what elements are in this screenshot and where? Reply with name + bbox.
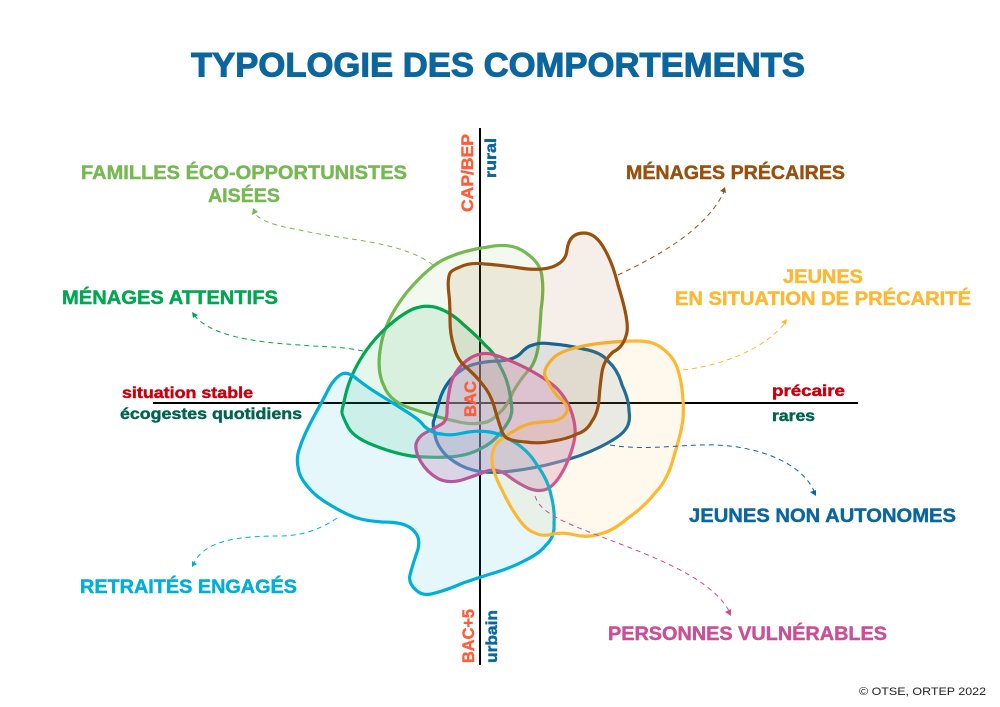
label: familles éco-opportunistes <box>81 161 407 207</box>
axis label: rares: rares <box>772 408 815 425</box>
axis label: BAC+5: BAC+5 <box>460 609 478 663</box>
arrow: jeunes précarité <box>683 319 787 370</box>
label: jeunes en situation de précarité: EN SITUATION DE PRÉCARITÉ <box>675 287 971 310</box>
blob: retraités engagés <box>297 373 554 594</box>
label: familles éco-opportunistes: AISÉES <box>208 184 280 207</box>
label: ménages précaires: MÉNAGES PRÉCAIRES <box>626 161 845 184</box>
arrow: non autonomes <box>610 445 816 496</box>
blob: jeunes en situation de précarité <box>492 341 683 536</box>
blob: personnes vulnérables <box>416 353 575 490</box>
title: TYPOLOGIE DES COMPORTEMENTS <box>191 46 805 84</box>
label: ménages attentifs: MÉNAGES ATTENTIFS <box>62 286 278 309</box>
label: familles éco-opportunistes: FAMILLES ÉCO-OPPORTUNISTES <box>81 161 407 184</box>
axis label: urbain: urbain <box>484 610 501 663</box>
blob: ménages précaires <box>448 233 627 443</box>
axis label: rural: rural <box>483 138 500 178</box>
axes <box>153 128 858 665</box>
axis label: écogestes quotidiens: écogestes quotidiens <box>120 406 302 423</box>
axis label: situation stable: situation stable <box>122 385 253 402</box>
label: jeunes en situation de précarité: JEUNES <box>783 266 863 288</box>
arrow: précaires <box>618 187 726 275</box>
arrow: vulnérables <box>535 496 731 616</box>
blob: ménages attentifs <box>342 306 512 457</box>
label: jeunes non autonomes: JEUNES NON AUTONOMES <box>689 505 956 527</box>
axis label: précaire: précaire <box>772 383 845 400</box>
blob: jeunes non autonomes <box>433 343 630 472</box>
credit: © OTSE, ORTEP 2022 <box>859 686 986 698</box>
blob: familles éco-opportunistes <box>379 245 543 424</box>
arrow: retraités <box>192 518 337 567</box>
axis label: CAP/BEP: CAP/BEP <box>459 134 477 212</box>
axis label: BAC: BAC <box>462 381 480 417</box>
label: retraités engagés: RETRAITÉS ENGAGÉS <box>80 575 297 598</box>
arrow: attentifs <box>192 312 363 351</box>
label: personnes vulnérables: PERSONNES VULNÉRABLES <box>608 622 887 645</box>
arrow: familles <box>252 208 433 265</box>
label: jeunes en situation de précarité <box>675 266 971 310</box>
